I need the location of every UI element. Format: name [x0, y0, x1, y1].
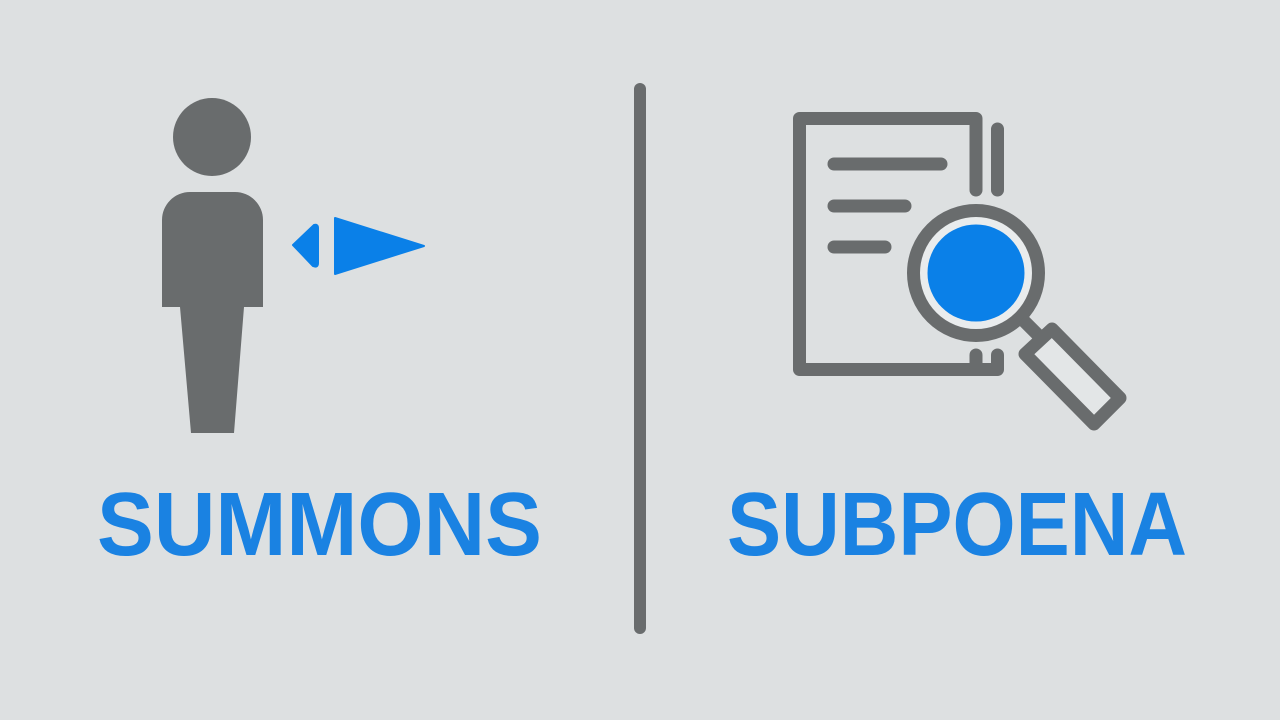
panel: summons [97, 98, 542, 575]
heading: subpoena: SUBPOENA [727, 475, 1187, 575]
center divider [634, 83, 646, 634]
icon: magnifying glass [914, 210, 1120, 424]
icon: blue arrow pointer [293, 218, 424, 274]
heading: summons: SUMMONS [97, 475, 542, 575]
panel: subpoena [727, 118, 1187, 575]
document text lines [834, 164, 941, 247]
icon: document [800, 118, 998, 370]
icon: person [162, 98, 263, 433]
